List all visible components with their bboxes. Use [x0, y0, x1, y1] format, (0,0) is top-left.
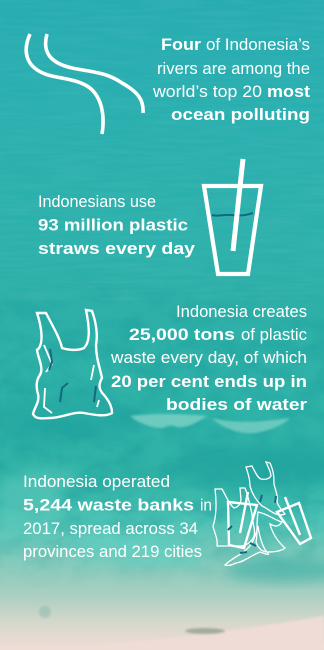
- text: waste banks: Indonesia operated: [23, 473, 170, 491]
- text: four rivers: ocean polluting: [171, 106, 310, 124]
- icon: plastic bag: [33, 310, 112, 418]
- text: four rivers: Four: [161, 36, 202, 54]
- icon: rivers: [26, 34, 143, 134]
- text: plastic waste: 20 per cent ends up in: [111, 373, 307, 391]
- text: plastic waste: Indonesia creates: [176, 303, 307, 321]
- text: plastic waste: of plastic: [241, 326, 307, 344]
- text: four rivers: of Indonesia’s: [206, 36, 310, 54]
- text: waste banks: 5,244 waste banks: [23, 496, 194, 514]
- icon: collage of bags and cups: [213, 462, 311, 565]
- text: straws: straws every day: [38, 240, 196, 258]
- text: four rivers: [152, 36, 311, 124]
- text: waste banks: 2017, spread across 34: [23, 520, 198, 538]
- text: plastic waste: 25,000 tons: [129, 326, 235, 344]
- text: waste banks: provinces and 219 cities: [23, 543, 202, 561]
- text: plastic waste: waste every day, of which: [110, 349, 307, 367]
- text: waste banks: [23, 473, 212, 561]
- text: four rivers: world’s top 20: [152, 83, 262, 101]
- text: straws: Indonesians use: [38, 193, 156, 211]
- icon: cup with straw: [204, 159, 261, 274]
- text: plastic waste: [110, 303, 308, 414]
- text: four rivers: most: [267, 83, 311, 101]
- text: waste banks: in: [200, 496, 212, 514]
- text: plastic waste: bodies of water: [166, 396, 308, 414]
- text: four rivers: rivers are among the: [157, 60, 310, 78]
- text: straws: [38, 193, 196, 258]
- text: straws: 93 million plastic: [38, 216, 188, 234]
